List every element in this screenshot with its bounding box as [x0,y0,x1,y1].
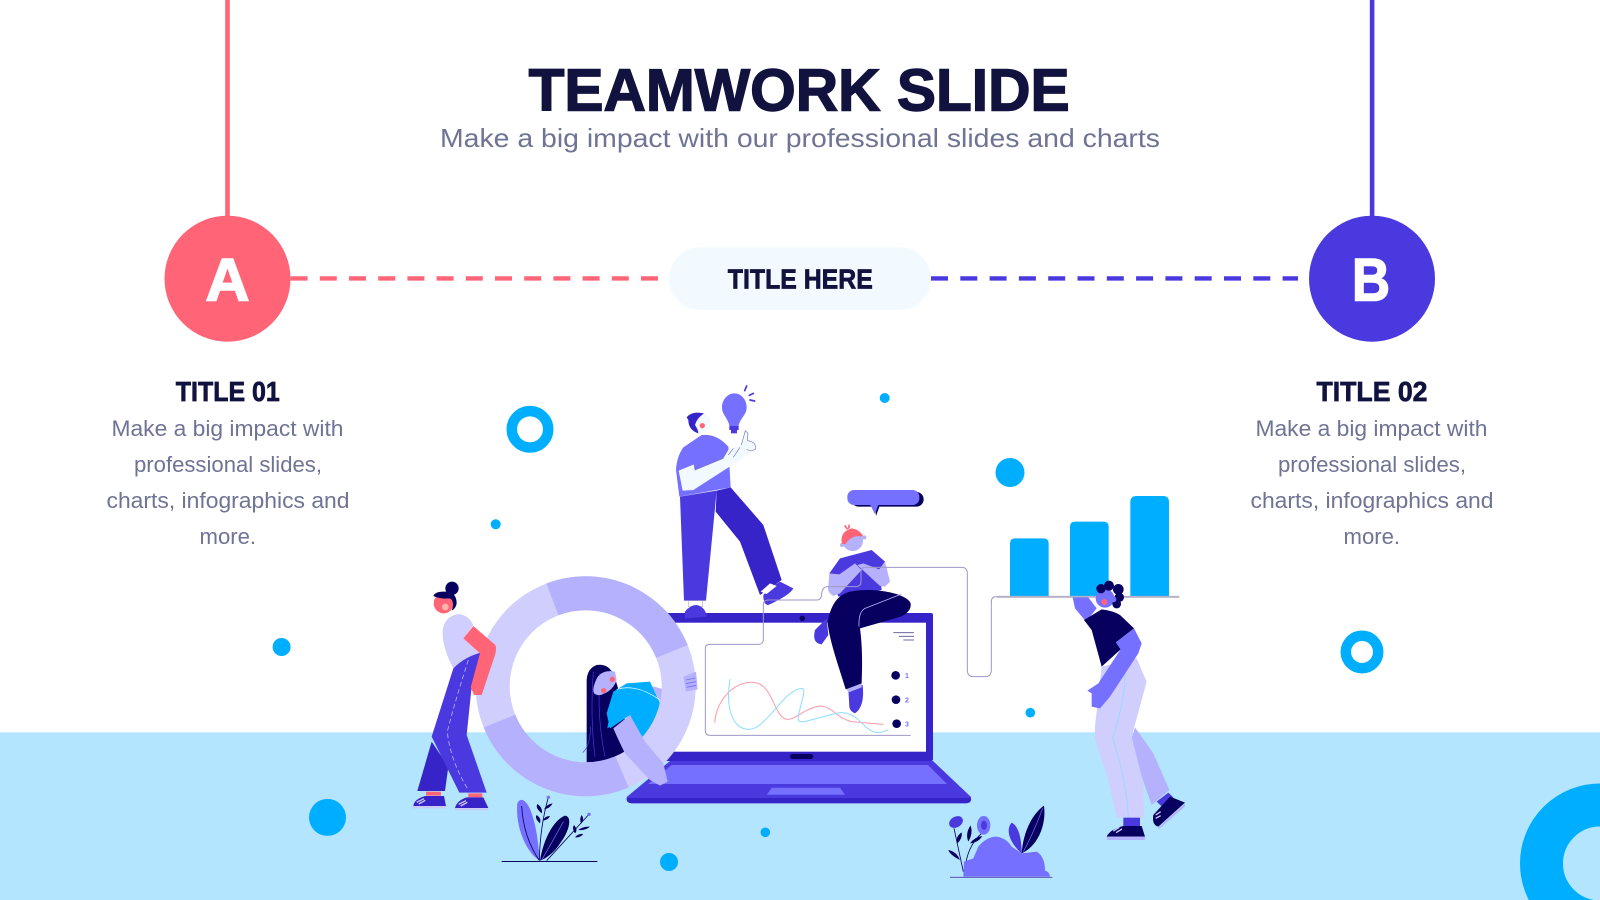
shoes [814,618,863,713]
centre pill [669,247,931,310]
text block: title 01: professional slides, [134,452,322,477]
text block: title 01: TITLE 01 [176,376,280,407]
title: TEAMWORK SLIDE [529,57,1070,123]
speech bubble [847,490,924,516]
text block: title 02: more. [1344,524,1400,549]
connector wire [705,567,997,735]
shirt [829,550,885,597]
lower arm [1087,628,1142,708]
bulb [722,386,755,433]
donut chart ring [493,593,679,779]
centre pill: TITLE HERE [728,263,873,294]
head [840,525,866,551]
floor band [0,732,1600,900]
back leg [417,742,448,791]
connector: A vertical line [225,0,230,218]
arm [463,626,496,695]
text block: title 01: charts, infographics and [106,488,350,513]
text block: title 02: charts, infographics and [1250,488,1494,513]
plant: right [947,806,1052,878]
arms [828,562,890,596]
text block: title 02: Make a big impact with [1256,416,1488,441]
badge A: A [206,246,250,313]
arm [679,430,755,491]
text block: title 02: TITLE 02 [1316,376,1428,407]
bar chart [997,496,1179,598]
decorative dots and rings [273,393,1378,871]
character: woman at left [413,582,496,810]
front leg [680,491,717,601]
character: seated man [814,490,924,713]
shoes [1107,793,1185,840]
corner ring [1542,805,1600,900]
raised arm [1073,597,1097,622]
laptop screen line chart [715,633,914,733]
chart legend: 2 [905,697,909,704]
laptop [627,613,971,803]
socks and shoes [413,792,488,810]
text block: title 02: professional slides, [1278,452,1466,477]
connector: A dashed line [291,276,658,281]
plant: left [502,796,597,862]
torso [676,435,731,497]
head [687,413,710,434]
head [433,582,459,613]
pants [432,653,487,793]
head [1096,581,1124,608]
back leg [716,487,782,595]
shirt [443,614,480,668]
character: man with light bulb [676,386,793,618]
connector: B dashed line [931,276,1298,281]
connector: B vertical line [1370,0,1374,218]
character: woman in ring, hair and shirt [583,665,664,767]
chart legend: 3 [905,721,909,728]
pants [828,590,911,689]
chart legend [891,633,914,728]
subtitle: Make a big impact with our professional slides and charts [440,123,1160,153]
text block: title 01: Make a big impact with [112,416,344,441]
back leg [1132,727,1169,805]
shoes [685,582,793,618]
text block: title 02 [1250,376,1494,549]
character: woman in ring, arm and hand [607,672,698,786]
text block: title 01 [106,376,350,549]
badge B [1309,216,1435,342]
chart legend: 1 [905,673,909,680]
badge B: B [1352,246,1390,313]
front leg [1095,658,1147,817]
badge A [164,216,290,342]
character: man holding chart [1095,658,1185,840]
shirt [1084,609,1134,667]
text block: title 01: more. [200,524,256,549]
